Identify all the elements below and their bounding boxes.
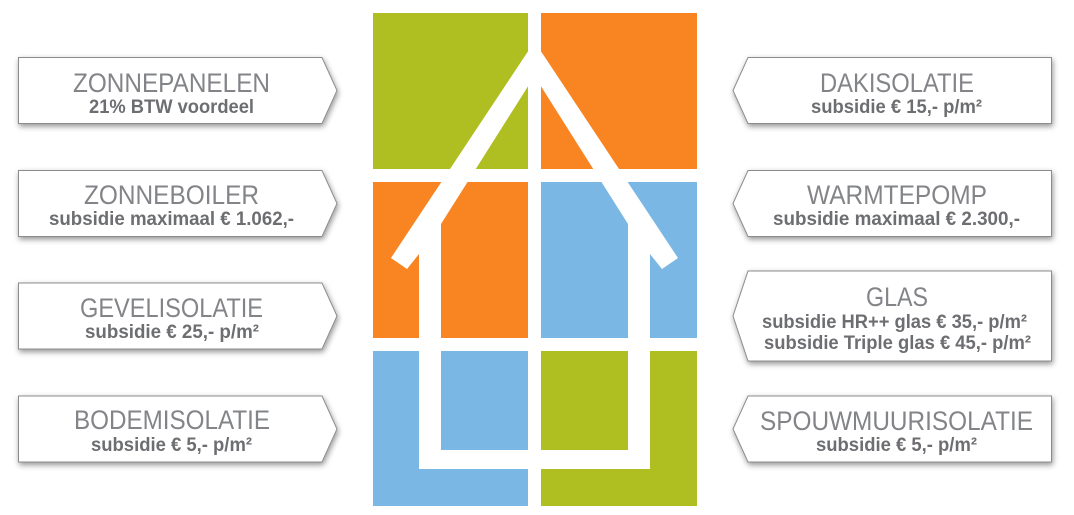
panel: glas (733, 271, 1052, 361)
label shape (18, 58, 337, 124)
heading: GEVELISOLATIE (80, 293, 263, 323)
icon: white house outline (391, 42, 678, 469)
label shape (18, 396, 337, 462)
text: HR++ glas: subsidie HR++ glas € 35,- p/m² (762, 312, 1027, 333)
text: 21% BTW voordeel (89, 97, 254, 118)
text: triple glas: subsidie Triple glas € 45,- p/m² (764, 333, 1031, 354)
text: subsidie maximaal € 2.300,- (773, 209, 1020, 230)
panel: warmtepomp (733, 170, 1052, 236)
text: subsidie € 15,- p/m² (811, 97, 982, 118)
label shape (733, 58, 1052, 124)
panel: bodemisolatie (18, 396, 337, 462)
text: subsidie € 5,- p/m² (91, 435, 252, 456)
label shape (733, 170, 1052, 236)
panel: zonneboiler (18, 170, 337, 236)
heading: SPOUWMUURISOLATIE (760, 406, 1033, 436)
tile: bottom right green (541, 351, 697, 506)
heading: WARMTEPOMP (807, 180, 987, 210)
heading: ZONNEPANELEN (73, 68, 270, 98)
panel: colour tile grid with house (373, 13, 697, 506)
tile: top left green (373, 13, 528, 169)
heading: BODEMISOLATIE (74, 405, 270, 435)
text: subsidie € 5,- p/m² (816, 435, 977, 456)
tile: bottom left blue (373, 351, 528, 506)
label shape (733, 396, 1052, 462)
heading: ZONNEBOILER (84, 180, 259, 210)
label shape (733, 271, 1052, 361)
panel: spouwmuurisolatie (733, 396, 1052, 462)
tile: top right orange (541, 13, 697, 169)
panel: gevelisolatie (18, 283, 337, 349)
heading: DAKISOLATIE (820, 68, 974, 98)
heading: GLAS (866, 282, 928, 312)
panel: dakisolatie (733, 58, 1052, 124)
tile: middle right blue (541, 182, 697, 338)
panel: zonnepanelen (18, 58, 337, 124)
label shape (18, 170, 337, 236)
text: subsidie maximaal € 1.062,- (49, 209, 294, 230)
text: subsidie € 25,- p/m² (85, 322, 259, 343)
label shape (18, 283, 337, 349)
tile: middle left orange (373, 182, 528, 338)
